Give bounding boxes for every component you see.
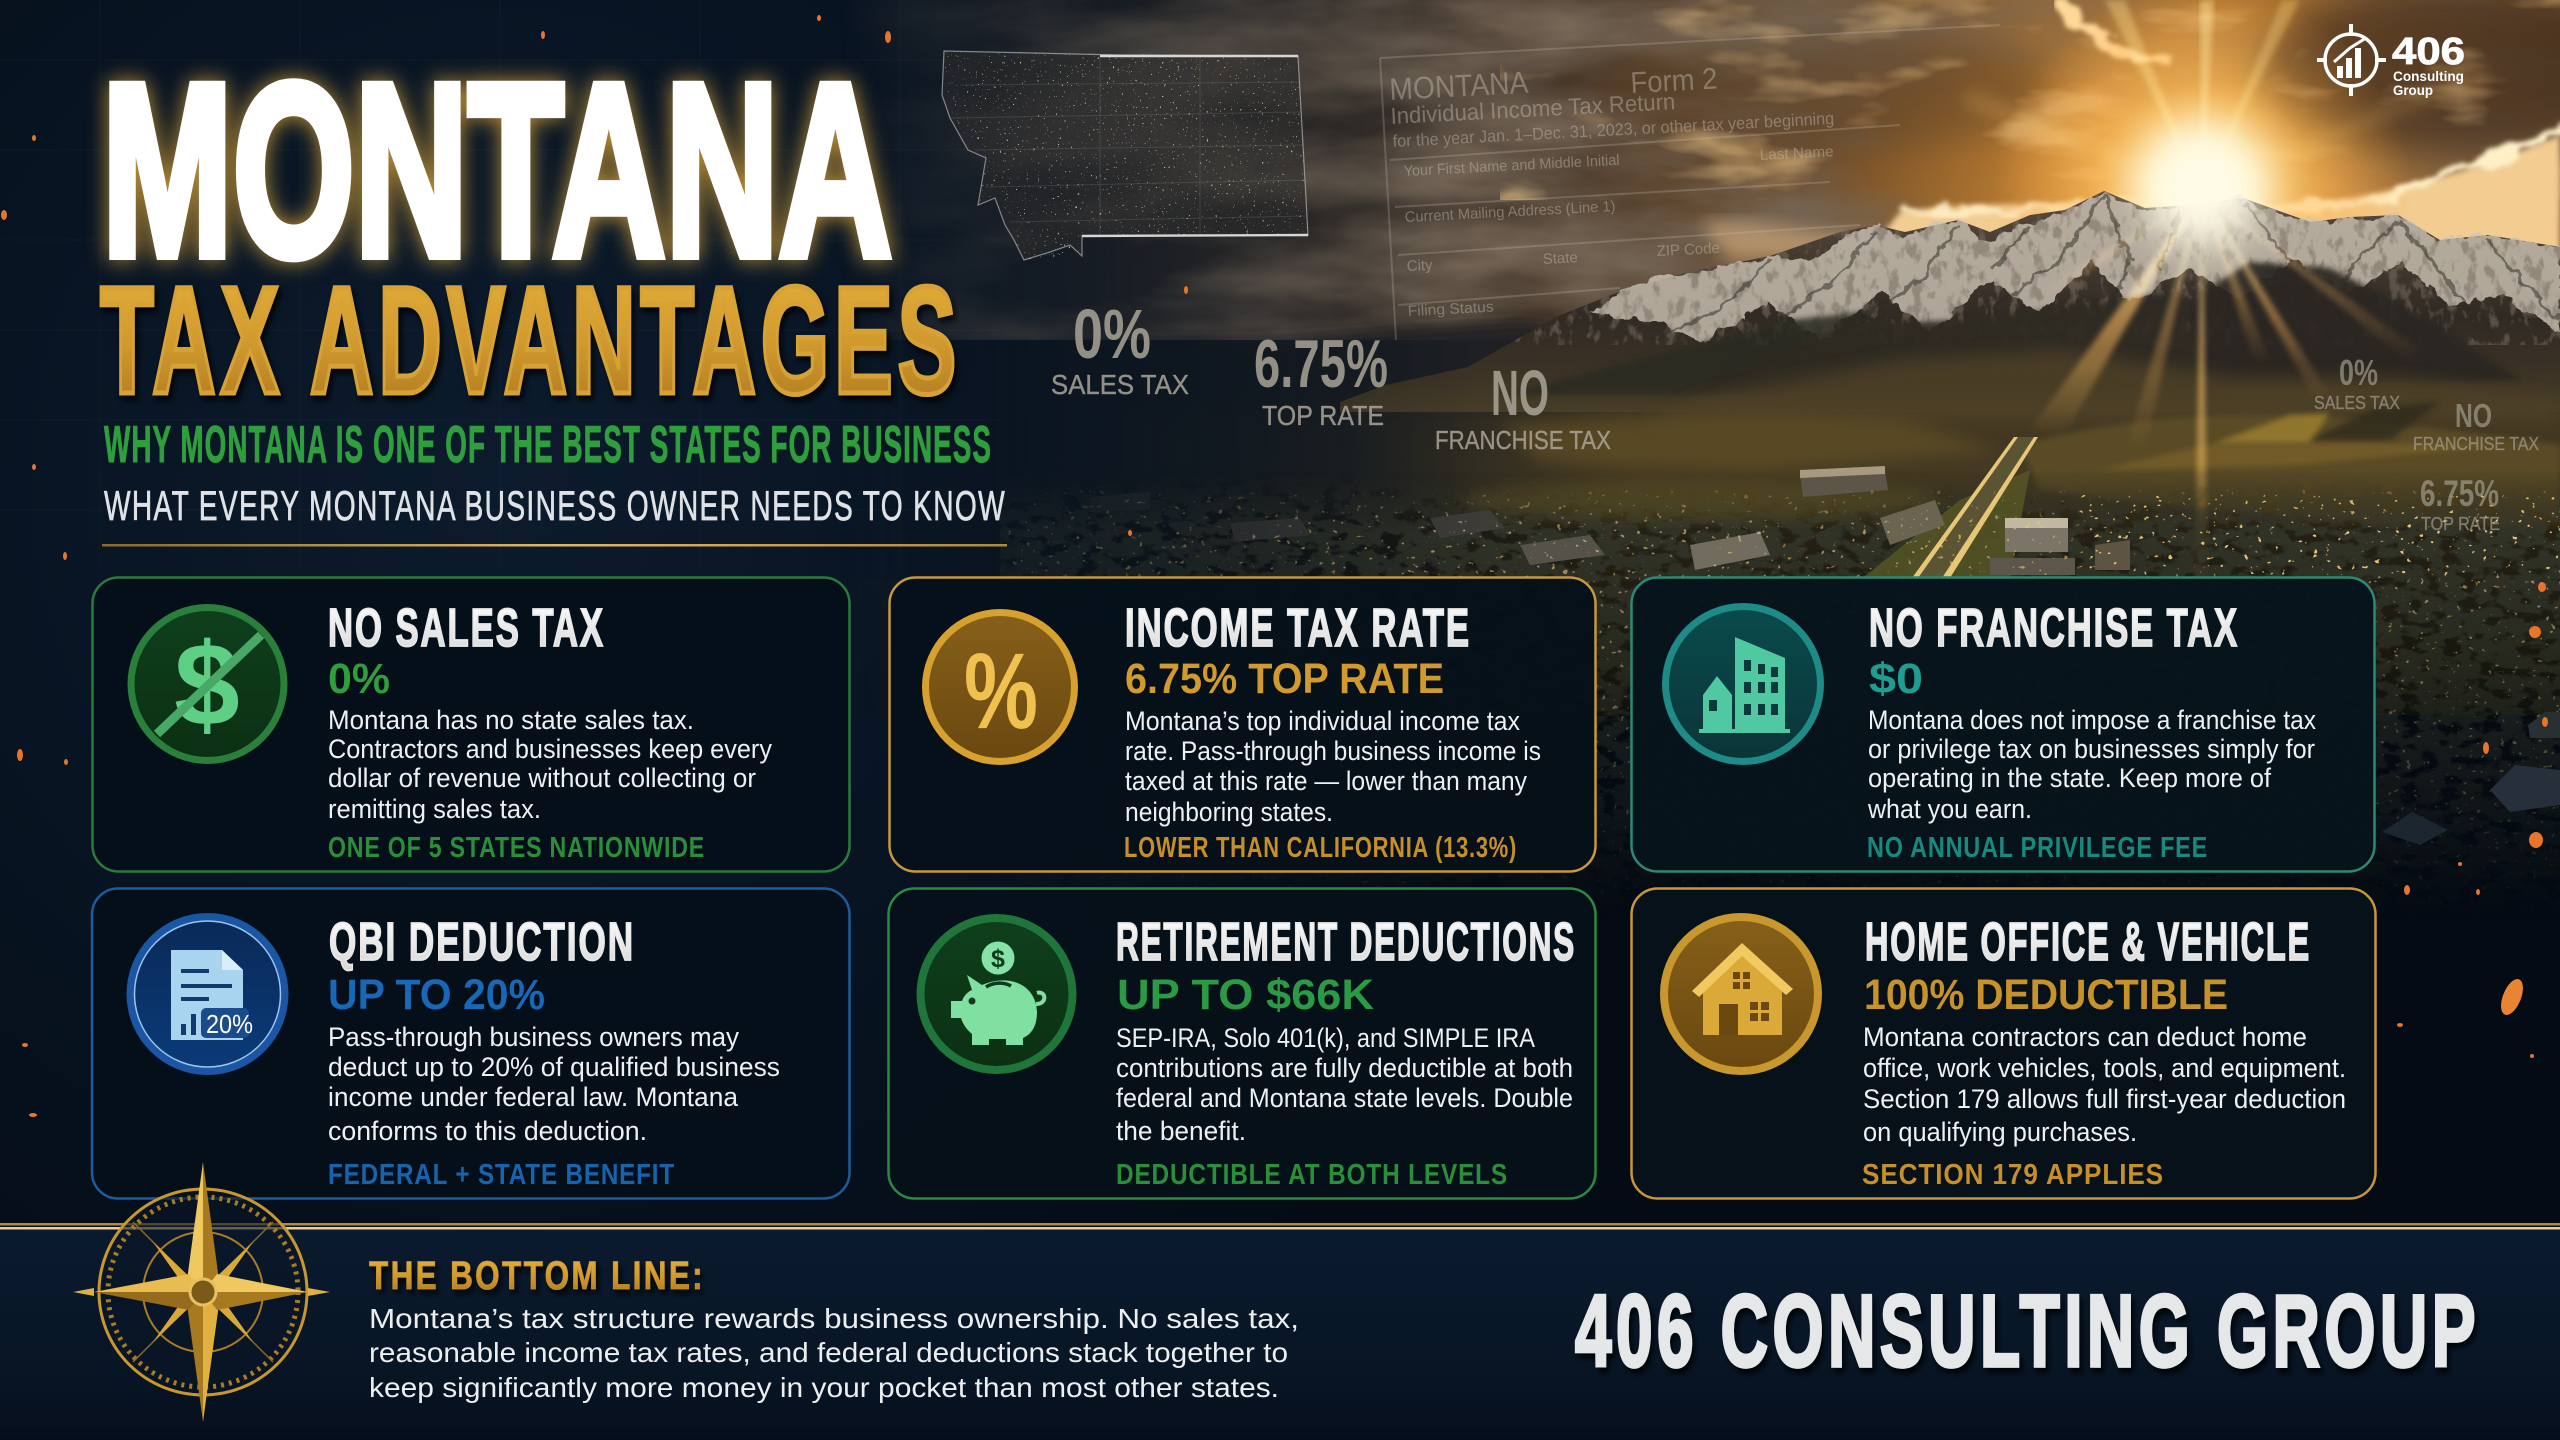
panel: no sales tax xyxy=(92,578,850,872)
bright sky under the cloud deck xyxy=(1884,134,2560,247)
logo: 406 Consulting Group: Consulting xyxy=(2393,68,2464,84)
card text: office, work vehicles, tools, and equipment. xyxy=(1863,1053,2346,1083)
card text: neighboring states. xyxy=(1125,797,1333,827)
card text: NO ANNUAL PRIVILEGE FEE xyxy=(1867,832,2208,864)
card text: LOWER THAN CALIFORNIA (13.3%) xyxy=(1124,832,1517,864)
card text: on qualifying purchases. xyxy=(1863,1117,2137,1147)
card text: NO FRANCHISE TAX xyxy=(1869,598,2239,658)
card text xyxy=(1867,598,2316,864)
embers xyxy=(1,15,2548,1117)
card text: UP TO 20% xyxy=(328,971,545,1019)
card text: dollar of revenue without collecting or xyxy=(328,763,756,793)
montana state map overlay xyxy=(940,50,1310,260)
card text: Montana has no state sales tax. xyxy=(328,705,694,735)
card text xyxy=(1862,912,2346,1191)
floating stats: large: 6.75% xyxy=(1254,326,1388,402)
card text: Pass-through business owners may xyxy=(328,1022,739,1052)
header rule xyxy=(102,544,1007,546)
floating stats: large: 0% xyxy=(1073,295,1151,373)
faint grid xyxy=(0,0,1000,570)
logo: 406 Consulting Group xyxy=(2317,24,2465,98)
card text: conforms to this deduction. xyxy=(328,1116,647,1146)
landscape photo: mountains and sunset xyxy=(878,0,2560,898)
town, road and trees xyxy=(1000,437,2560,898)
floating stats: small xyxy=(2314,352,2539,534)
floating stats: large: FRANCHISE TAX xyxy=(1435,425,1611,455)
mountain range xyxy=(1340,190,2560,425)
icon: piggy bank: $ xyxy=(991,945,1005,973)
panel: home office and vehicle xyxy=(1632,888,2376,1198)
tax form overlay: City xyxy=(1406,257,1434,275)
tax form overlay: State xyxy=(1542,249,1578,268)
valley detail xyxy=(1500,402,2560,527)
card text: taxed at this rate — lower than many xyxy=(1125,766,1527,796)
card text: DEDUCTIBLE AT BOTH LEVELS xyxy=(1116,1159,1508,1191)
card text: QBI DEDUCTION xyxy=(329,912,635,972)
title: MONTANA: MONTANA xyxy=(102,33,892,308)
footer band xyxy=(0,1223,2560,1440)
icon: percent coin: % xyxy=(964,630,1038,751)
card text: Montana’s top individual income tax xyxy=(1125,706,1520,736)
card text xyxy=(1116,912,1576,1191)
panel: income tax rate xyxy=(890,578,1596,872)
icon: buildings xyxy=(1662,603,1824,765)
subtitle: TAX ADVANTAGES: TAX ADVANTAGES xyxy=(100,255,961,426)
icon: house xyxy=(1660,913,1822,1075)
panel: retirement deductions xyxy=(888,888,1596,1198)
tax form overlay: Individual Income Tax Return xyxy=(1390,88,1676,129)
panel: no franchise tax xyxy=(1632,578,2374,872)
logo: 406 Consulting Group: Group xyxy=(2393,82,2433,98)
bottom line text: Montana’s tax structure rewards business ownership. No sales tax, xyxy=(369,1303,1299,1334)
card text xyxy=(328,598,772,864)
tagline green: WHY MONTANA IS ONE OF THE BEST STATES FOR BUSINESS xyxy=(104,416,992,474)
tagline white: WHAT EVERY MONTANA BUSINESS OWNER NEEDS TO KNOW xyxy=(104,482,1006,529)
tax form overlay: Current Mailing Address (Line 1) xyxy=(1404,198,1616,226)
distant blue hills and left shade xyxy=(886,313,1588,576)
card text: Montana contractors can deduct home xyxy=(1863,1022,2307,1052)
floating stats: large: NO xyxy=(1491,357,1549,429)
floating stats: small: SALES TAX xyxy=(2314,393,2400,413)
card text: 100% DEDUCTIBLE xyxy=(1864,971,2228,1019)
card text: operating in the state. Keep more of xyxy=(1868,763,2271,793)
floating stats: small: 6.75% xyxy=(2420,473,2499,514)
tax form overlay: Your First Name and Middle Initial xyxy=(1403,152,1620,180)
card text: INCOME TAX RATE xyxy=(1125,598,1471,658)
tax form overlay: Form 2 xyxy=(1630,62,1718,100)
floating stats: large: SALES TAX xyxy=(1051,369,1189,400)
card text xyxy=(328,912,780,1191)
floating stats: small: TOP RATE xyxy=(2421,514,2500,534)
panel: qbi deduction xyxy=(92,888,850,1198)
floating stats: large xyxy=(1051,295,1611,455)
card text: Section 179 allows full first-year deduction xyxy=(1863,1084,2346,1114)
card text: ONE OF 5 STATES NATIONWIDE xyxy=(328,832,705,864)
tax form overlay: for the year Jan. 1–Dec. 31, 2023, or other tax year beginning xyxy=(1392,109,1835,151)
card text: Contractors and businesses keep every xyxy=(328,734,772,764)
card text: SEP-IRA, Solo 401(k), and SIMPLE IRA xyxy=(1116,1023,1535,1053)
tax form overlay xyxy=(1380,25,2000,340)
bottom line text xyxy=(369,1303,1299,1403)
icon: document with 20% xyxy=(126,913,288,1075)
icon: piggy bank xyxy=(916,914,1076,1074)
tax form overlay: Filing Status xyxy=(1407,299,1494,320)
card text: federal and Montana state levels. Double xyxy=(1116,1083,1573,1113)
card text: income under federal law. Montana xyxy=(328,1082,739,1112)
floating stats: small: FRANCHISE TAX xyxy=(2413,434,2539,454)
bottom line text: keep significantly more money in your pocket than most other states. xyxy=(369,1372,1279,1403)
card text: Montana does not impose a franchise tax xyxy=(1868,705,2316,735)
floating stats: small: NO xyxy=(2455,397,2492,434)
tax form overlay: ZIP Code xyxy=(1656,240,1720,260)
icon: crossed-out dollar xyxy=(128,604,288,764)
tax form overlay: MONTANA xyxy=(1389,65,1529,107)
card text: FEDERAL + STATE BENEFIT xyxy=(328,1159,675,1191)
card text: 6.75% TOP RATE xyxy=(1125,655,1444,703)
card text: RETIREMENT DEDUCTIONS xyxy=(1116,912,1576,972)
tax form overlay: Last Name xyxy=(1759,143,1834,164)
card text: rate. Pass-through business income is xyxy=(1125,736,1541,766)
floating stats: small: 0% xyxy=(2339,352,2378,393)
icon: percent coin xyxy=(922,609,1078,765)
valley floor xyxy=(820,395,2560,715)
icon: gold compass rose xyxy=(73,1162,330,1422)
card text: what you earn. xyxy=(1867,794,2032,824)
card text: $0 xyxy=(1869,655,1923,703)
bottom line text: reasonable income tax rates, and federal deductions stack together to xyxy=(369,1337,1288,1368)
card text: or privilege tax on businesses simply for xyxy=(1868,734,2315,764)
floating stats: large: TOP RATE xyxy=(1262,400,1384,431)
card text xyxy=(1124,598,1541,864)
bottom line heading: THE BOTTOM LINE: xyxy=(369,1254,705,1298)
card text: remitting sales tax. xyxy=(328,794,541,824)
icon: document with 20%: 20% xyxy=(206,1009,253,1039)
card text: UP TO $66K xyxy=(1117,971,1374,1019)
sun rays xyxy=(1962,0,2490,620)
card text: SECTION 179 APPLIES xyxy=(1862,1159,2164,1191)
card text: the benefit. xyxy=(1116,1116,1246,1146)
card text: deduct up to 20% of qualified business xyxy=(328,1052,780,1082)
card text: 0% xyxy=(328,655,390,703)
logo: 406 Consulting Group: 406 xyxy=(2392,31,2465,73)
icon: crossed-out dollar: $ xyxy=(174,619,240,751)
card text: NO SALES TAX xyxy=(328,598,605,658)
card text: contributions are fully deductible at both xyxy=(1116,1053,1573,1083)
